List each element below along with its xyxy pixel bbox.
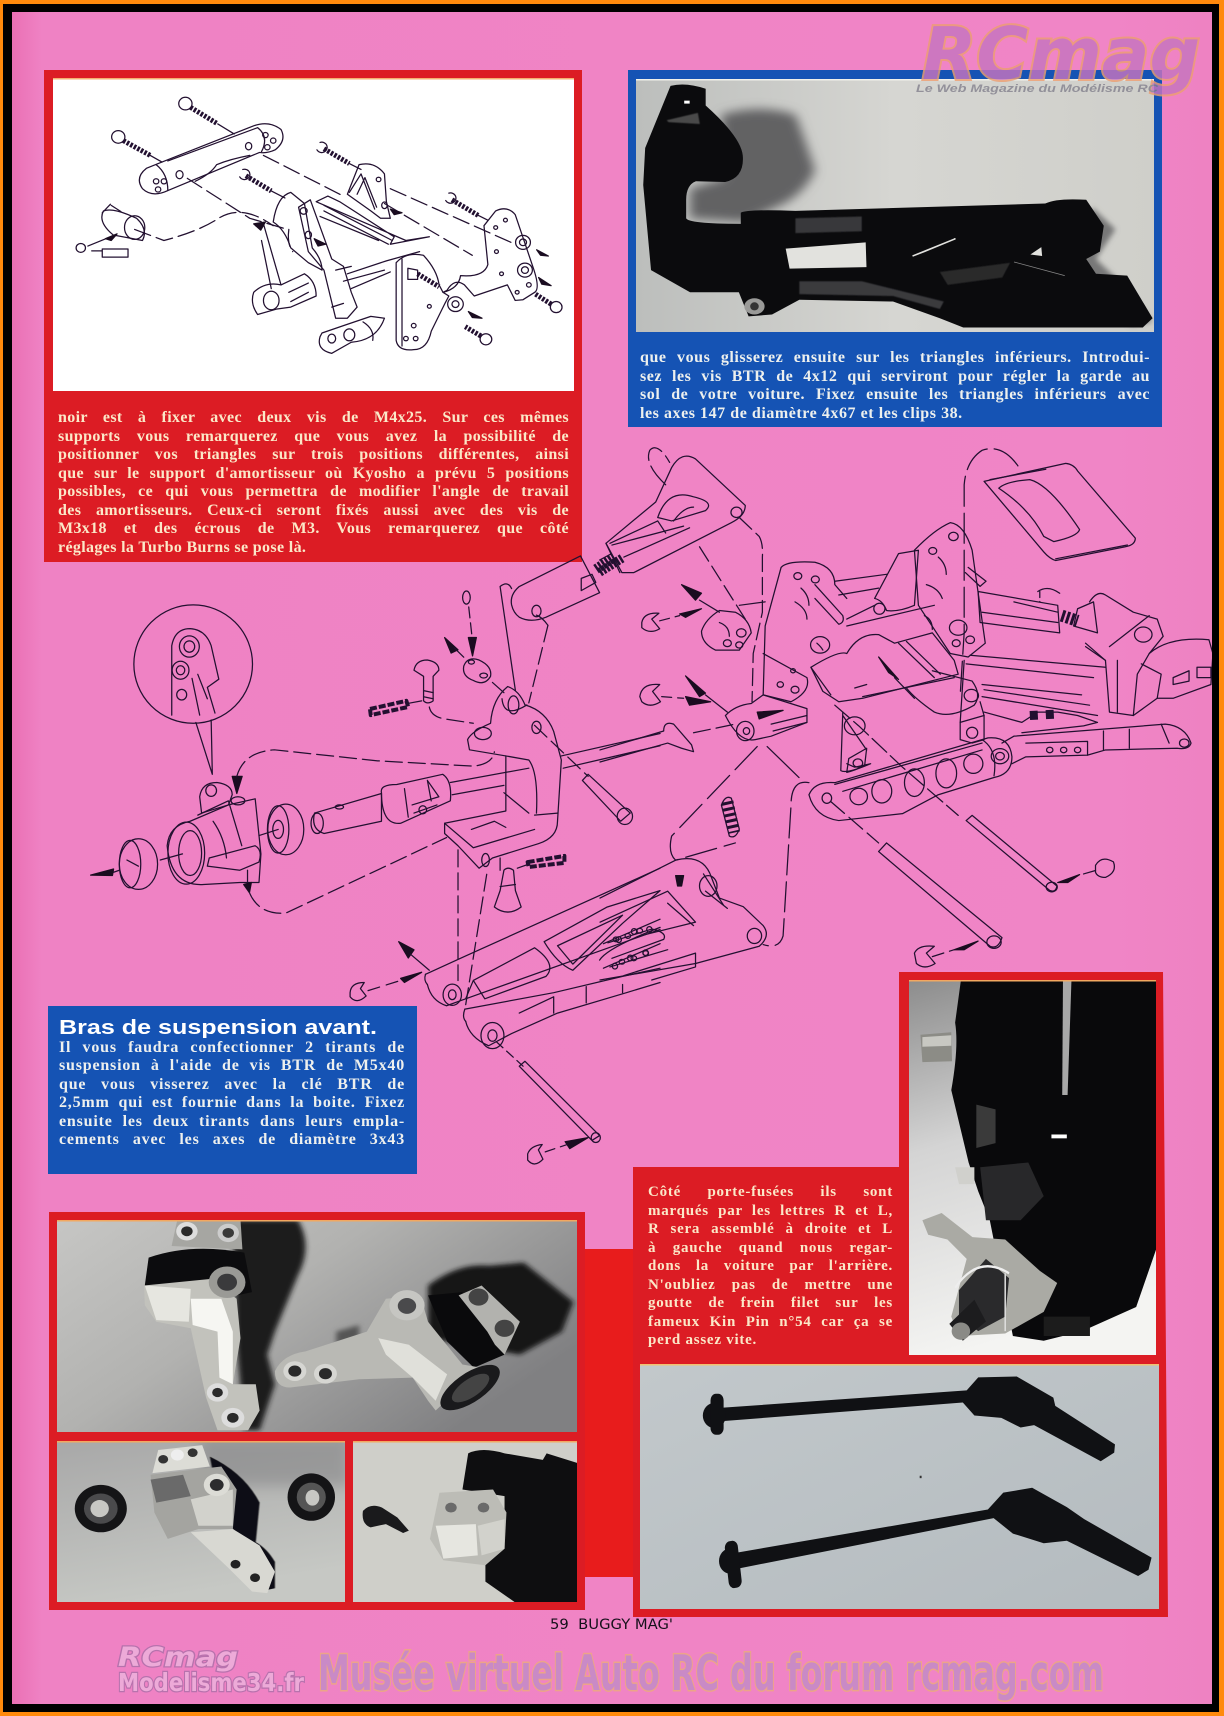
blue caption text: les axes 147 de diamètre 4x67 et les clips 38. <box>640 404 963 422</box>
right half of drawing: arms, shock tower, cover, gearbox <box>596 448 1213 980</box>
photo: knuckle mounted on arm with kingpin <box>353 1441 577 1602</box>
red caption text: supports vous remarquerez que vous avez la possibilité de <box>58 428 569 444</box>
red caption text: positionner vos triangles sur trois positions différentes, ainsi <box>58 446 569 463</box>
red caption text: réglages la Turbo Burns se pose là. <box>58 538 306 556</box>
body text: suspension à l'aide de vis BTR de M5x40 <box>59 1057 405 1074</box>
watermark: RCmag Modelisme34.fr, bottom left <box>117 1642 305 1697</box>
body text: 2,5mm qui est fournie dans la boite. Fixez <box>59 1094 405 1111</box>
watermark: RCmag Modelisme34.fr, bottom left: RCmag <box>118 1642 238 1673</box>
red caption text: N'oubliez pas de mettre une <box>648 1276 893 1292</box>
blue caption text: sol de votre voiture. Fixez ensuite les triangles inférieurs avec <box>640 386 1150 403</box>
blue caption text <box>640 349 1150 422</box>
red caption text <box>58 409 569 556</box>
page number and magazine name: 59 BUGGY MAG' <box>550 1617 673 1633</box>
technical drawing: shock tower assembly <box>53 78 574 391</box>
blue caption text: que vous glisserez ensuite sur les triangles inférieurs. Introdui- <box>640 349 1150 366</box>
red caption text: R sera assemblé à droite et L <box>648 1221 893 1237</box>
photo: two knuckles <box>57 1220 577 1432</box>
red caption text: que sur le support d'amortisseur où Kyosho a prévu 5 positions <box>58 464 569 482</box>
red caption text: marqués par les lettres R et L, <box>648 1202 893 1218</box>
body text <box>59 1039 405 1148</box>
red caption text: M3x18 et des écrous de M3. Vous remarquerez que côté <box>58 520 569 537</box>
body text: cements avec les axes de diamètre 3x43 <box>59 1131 405 1148</box>
red background shape <box>633 972 1168 1617</box>
heading: Bras de suspension avant. <box>59 1017 377 1039</box>
panel: top-right photo of suspension arm with blue caption <box>628 70 1162 427</box>
red caption text: à gauche quand nous regar- <box>648 1240 893 1256</box>
body text: que vous visserez avec la clé BTR de <box>59 1076 405 1093</box>
red caption text: goutte de frein filet sur les <box>648 1295 893 1311</box>
panel: top-left exploded drawing with red caption <box>44 70 582 562</box>
red caption text: perd assez vite. <box>648 1332 757 1348</box>
blue caption text: sez les vis BTR de 4x12 qui serviront pour régler la garde au <box>640 368 1150 384</box>
photo: knuckle with bearings <box>57 1441 345 1602</box>
red caption text: possibles, ce qui vous permettra de modifier l'angle de travail <box>58 483 569 500</box>
red caption text: dons la voiture par l'arrière. <box>648 1258 893 1274</box>
red caption text: des amortisseurs. Ceux-ci seront fixés aussi avec des vis de <box>58 502 569 518</box>
panel: blue text box, front suspension arms <box>48 1006 417 1174</box>
panel: lower-right red block with text and photos <box>633 972 1168 1617</box>
photo: two drive shafts <box>640 1364 1159 1609</box>
body text: Il vous faudra confectionner 2 tirants de <box>59 1039 405 1056</box>
watermark: RCmag logo, top right: Le Web Magazine du Modélisme RC <box>916 83 1159 95</box>
red caption text: fameux Kin Pin n°54 car ça se <box>648 1314 893 1330</box>
left half of drawing: knuckle, bearings, axle, C-hub <box>91 554 660 1164</box>
red caption text: Côté porte-fusées ils sont <box>648 1184 893 1200</box>
red caption text <box>648 1184 893 1348</box>
body text: ensuite les deux tirants dans leurs empla- <box>59 1113 405 1130</box>
red caption text: noir est à fixer avec deux vis de M4x25. Sur ces mêmes <box>58 409 569 426</box>
panel: lower-left photos of steering knuckles <box>49 1212 585 1610</box>
photo: knuckle on complete chassis <box>909 980 1156 1355</box>
central exploded diagram: front suspension assembly <box>90 447 1212 1165</box>
photo: black suspension arm <box>636 79 1154 332</box>
panel: red connector block behind lower photos <box>585 1249 645 1577</box>
